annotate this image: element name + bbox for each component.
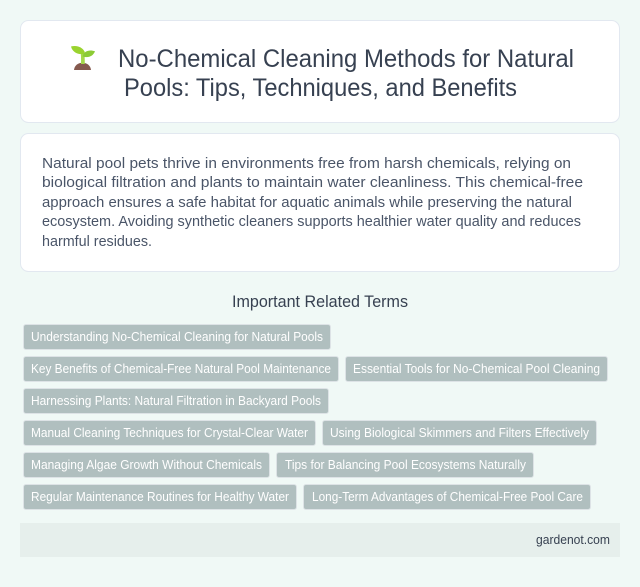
- tag: [346, 356, 608, 382]
- tag list: [24, 324, 608, 510]
- tag: Harnessing Plants: Natural Filtration in Backyard Pools: [31, 394, 321, 408]
- tag: [24, 356, 338, 382]
- icon: seedling: [71, 46, 95, 70]
- panel: intro text: harmful residues.: [42, 233, 152, 250]
- title: No-Chemical Cleaning Methods for Natural: [118, 45, 574, 73]
- panel: title card: [20, 20, 620, 122]
- panel: intro text: biological filtration and plants to maintain water cleanliness. This chemical-free: [42, 174, 583, 191]
- tag: Using Biological Skimmers and Filters Effectively: [330, 426, 590, 440]
- footer: [20, 523, 620, 557]
- tag: [24, 324, 330, 350]
- tag: [24, 484, 296, 510]
- panel: intro text: Natural pool pets thrive in environments free from harsh chemicals, relying on: [42, 155, 571, 172]
- tag: Understanding No-Chemical Cleaning for Natural Pools: [31, 330, 323, 344]
- tag: Manual Cleaning Techniques for Crystal-Clear Water: [31, 426, 308, 440]
- tag: [24, 388, 328, 414]
- tag: Key Benefits of Chemical-Free Natural Pool Maintenance: [31, 362, 331, 376]
- heading: related terms: Important Related Terms: [232, 293, 408, 311]
- tag: [24, 452, 270, 478]
- tag: Long-Term Advantages of Chemical-Free Pool Care: [312, 490, 583, 504]
- panel: intro text: ecosystem. Avoiding synthetic cleaners supports healthier water quality and reduces: [42, 213, 581, 230]
- footer: gardenot.com: [536, 532, 610, 547]
- tag: [304, 484, 590, 510]
- title: Pools: Tips, Techniques, and Benefits: [124, 74, 517, 102]
- tag: Regular Maintenance Routines for Healthy Water: [31, 490, 289, 504]
- tag: [276, 452, 534, 478]
- tag: Tips for Balancing Pool Ecosystems Naturally: [285, 458, 527, 472]
- panel: intro text: [20, 134, 620, 272]
- tag: [322, 420, 596, 446]
- tag: Essential Tools for No-Chemical Pool Cleaning: [353, 362, 600, 376]
- panel: intro text: approach ensures a safe habitat for aquatic animals while preserving the natural: [42, 194, 572, 211]
- tag: [24, 420, 316, 446]
- title: [118, 45, 574, 102]
- tag: Managing Algae Growth Without Chemicals: [31, 458, 262, 472]
